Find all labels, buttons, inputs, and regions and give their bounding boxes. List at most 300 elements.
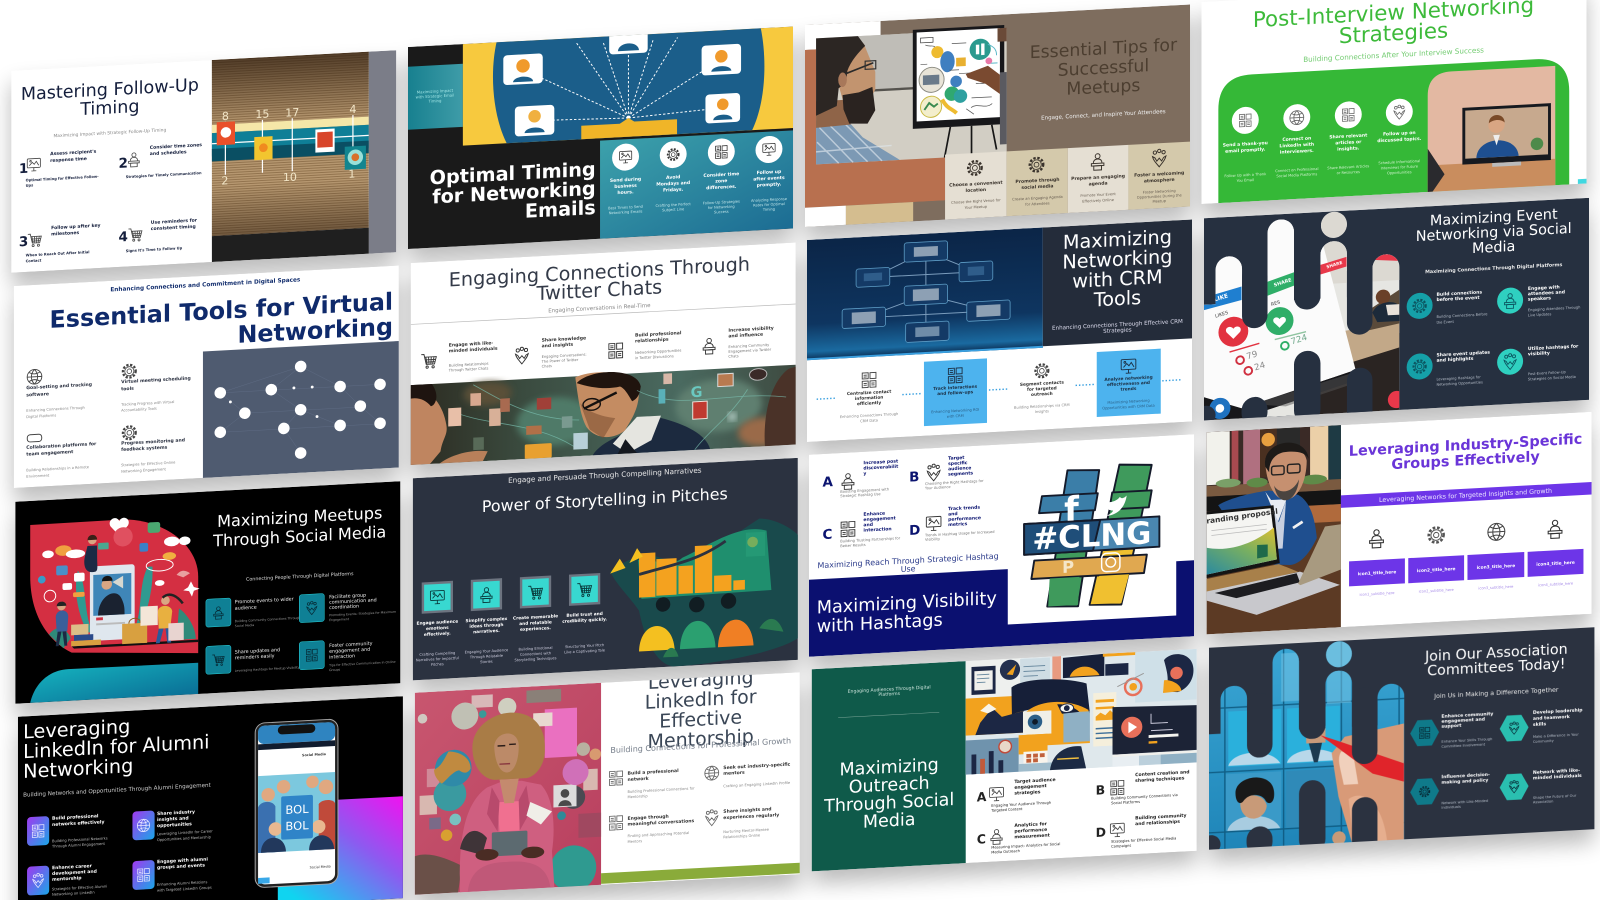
item: enhance community engagement: engagement and <box>1441 717 1485 725</box>
item: virtual meeting scheduling: Tracking Progress with Virtual <box>121 400 174 407</box>
subtitle: Maximizing Connections Through Digital Platforms <box>1425 262 1563 275</box>
item: analyze effectiveness <box>1097 349 1161 417</box>
item: consider time zone differences: zone <box>715 179 727 185</box>
item: build professional networks: Building Professional Networks <box>52 836 108 843</box>
item A: y <box>863 472 866 477</box>
item: share relevant articles: Share Relevant Articles <box>1327 164 1369 170</box>
item: engage audience emotions <box>416 582 459 668</box>
title box 1: icon1_title_here <box>1358 569 1396 577</box>
card: promote through social media <box>1007 148 1068 216</box>
item 4: Signs It's Time to Follow Up <box>126 246 183 253</box>
wood photo with timeline <box>212 52 369 236</box>
item C: C <box>977 831 986 847</box>
card: choose a convenient location: Choose the Right Venue for <box>951 198 1001 205</box>
item: share knowledge: Share knowledge <box>542 336 586 344</box>
item: progress monitoring: feedback systems <box>121 445 168 453</box>
item 3: milestones <box>51 230 79 237</box>
photo: man with laptop at cafe: randing proposal <box>1206 507 1278 526</box>
item B: Social Platforms <box>1111 800 1140 805</box>
item D: D <box>909 522 920 539</box>
item: utilize hashtags: Utilize hashtags for <box>1528 345 1578 352</box>
item 2: 2 <box>119 155 128 172</box>
item C <box>822 510 901 549</box>
item: track interactions: Track interactions <box>933 385 977 392</box>
subtitle: Enhancing Connections Through Effective CRM <box>1052 319 1183 332</box>
item: virtual meeting scheduling: Virtual meeting scheduling <box>121 377 191 385</box>
card: choose a convenient location: Your Meetup <box>965 205 988 210</box>
item: follow up on discussed topics: Interviews for Future <box>1381 164 1419 170</box>
item: enhance career development: Enhance career <box>52 864 92 871</box>
green side panel <box>812 661 966 871</box>
item: centralize contact: Centralize contact <box>847 390 891 397</box>
item: engage audience emotions: Narratives for Impactful <box>416 656 459 662</box>
item: avoid mondays and fridays: Crafting the Perfect <box>656 202 691 208</box>
item C: Measuring Impact: Analytics for Social <box>991 842 1060 850</box>
item: engage through conversations: Engage through <box>628 815 669 822</box>
title box 1 <box>1349 558 1405 597</box>
item C: performance <box>1014 827 1047 835</box>
item D: D <box>1096 824 1106 840</box>
item: influence decision-making: Network with Like-Minded <box>1441 799 1488 805</box>
item: share industry insights: insights and <box>157 815 189 823</box>
item: segment contacts: for targeted <box>1027 385 1057 393</box>
panel: slide Maximizing Meetups Through Social Media <box>15 481 400 704</box>
item: share knowledge: Engaging Conversations: <box>542 353 587 359</box>
item: network with like-minded individuals <box>1500 767 1582 806</box>
item: avoid mondays and fridays: Mondays and <box>656 180 690 188</box>
panel: slide Leveraging LinkedIn for Alumni Networking <box>18 696 403 900</box>
item: share industry insights <box>132 807 213 843</box>
title: Mentorship <box>648 726 754 753</box>
title: Maximizing Visibility <box>817 589 997 618</box>
panel: slide Engaging Connections Through Twitter Chats <box>411 243 796 465</box>
item D: Campaigns <box>1111 844 1131 849</box>
title box 1: icon1_subtitle_here <box>1359 591 1395 597</box>
item: centralize contact: Enhancing Connections Through <box>840 412 898 419</box>
card: foster a welcoming atmosphere: atmosphere <box>1144 177 1175 185</box>
icon: globe <box>1488 523 1505 541</box>
item: like-minded individuals <box>421 340 498 374</box>
subtitle: Join Us in Making a Difference Together <box>1433 687 1559 700</box>
item C: engagement <box>863 515 897 523</box>
item: engage with alumni groups: Engage with alumni <box>157 858 208 865</box>
item: build connections: the Event <box>1436 320 1454 325</box>
item: consider time zone differences: differences. <box>706 184 737 191</box>
item: follow up after events: promptly. <box>757 181 782 189</box>
title: Power of Storytelling in Pitches <box>482 484 728 516</box>
item: segment contacts: outreach <box>1031 391 1053 398</box>
title: Meetups <box>1066 76 1140 100</box>
title: Media <box>863 810 915 833</box>
item A: Target audience <box>1014 778 1056 785</box>
item B: Building Community Connections via <box>1111 793 1178 801</box>
item B: sharing techniques <box>1135 775 1185 784</box>
panel: slide Maximizing Visibility with Hashtags <box>809 434 1194 657</box>
item: create memorable experiences: Create memorable <box>513 614 558 622</box>
item B: Your Audience <box>925 485 951 490</box>
item: network with like-minded individuals: Network with like- <box>1533 768 1580 776</box>
item C: measurement <box>1014 832 1051 840</box>
green panel <box>1218 57 1569 203</box>
title: Maximizing <box>840 755 939 781</box>
item: influence decision-making: Individuals <box>1441 805 1461 810</box>
item: share industry insights: Leveraging LinkedIn for Career <box>157 829 213 836</box>
photo: man with laptop at cafe <box>1206 425 1341 634</box>
divider <box>411 304 796 325</box>
item: network with like-minded individuals: Association <box>1533 800 1553 805</box>
illustration collage <box>966 649 1197 775</box>
item: send during business hours <box>608 143 643 215</box>
item 2: Strategies for Timely Communication <box>126 171 202 179</box>
item: centralize contact <box>840 371 898 424</box>
item: promote events <box>206 594 300 630</box>
item A: A <box>822 474 833 491</box>
title: Networking via Social <box>1416 221 1572 245</box>
item A: Engaging Your Audience Through <box>991 801 1051 808</box>
item: track interactions: with CRM <box>947 414 964 419</box>
item: create memorable experiences: Connections with <box>520 651 551 657</box>
item: facilitate communication: Facilitate group <box>329 594 366 601</box>
item A: A <box>977 789 987 804</box>
photo in pill mask: RES <box>1270 300 1281 308</box>
item: analyze effectiveness: Maximizing Networking <box>1107 399 1150 405</box>
card: prepare an engaging agenda: Prepare an engaging <box>1071 174 1125 182</box>
item C: Media Outreach <box>991 849 1020 855</box>
wood photo with timeline: 4 <box>349 103 356 116</box>
item: connect on LinkedIn: interviewers. <box>1280 148 1314 156</box>
subtitle: Building Connections for Professional Growth <box>610 736 791 755</box>
panel: slide Maximizing Event Networking via Social Media <box>1196 198 1589 434</box>
item: send a thank-you email: You Email <box>1237 178 1254 183</box>
item: avoid mondays and fridays: Subject Line <box>662 207 685 212</box>
item: influence decision-making: Influence decision- <box>1441 773 1490 780</box>
panel: slide Power of Storytelling in Pitches <box>413 458 798 680</box>
item: simplify complex ideas: ideas through <box>469 622 503 630</box>
item A: Targeted Content <box>990 807 1023 813</box>
card: choose a convenient location <box>945 151 1007 220</box>
terracotta block <box>805 43 945 208</box>
panel: slide Maximizing Networking with CRM Tools <box>807 220 1192 442</box>
item: enhance career development: development and <box>52 869 97 877</box>
item: build relationships: Networking Opportunities <box>635 349 681 355</box>
item: build trust <box>562 574 607 655</box>
icon: podium person <box>1370 529 1383 548</box>
title: with Hashtags <box>817 611 943 637</box>
title: Successful <box>1058 56 1149 81</box>
item: follow up after events: Analyzing Response <box>751 197 787 203</box>
item: enhance community engagement: Enhance community <box>1441 712 1493 720</box>
item: foster community: Foster community <box>329 642 372 649</box>
network dots panel <box>203 341 399 478</box>
item: analyze effectiveness: effectiveness and <box>1107 380 1150 388</box>
item: network with like-minded individuals: minded individuals <box>1533 773 1582 782</box>
subtitle: Strategies <box>1103 327 1132 335</box>
item: build connections <box>1407 289 1488 326</box>
photo in pill mask: LIKES <box>1215 310 1229 320</box>
purple band <box>1341 482 1592 508</box>
item: share event updates: Share event updates <box>1436 351 1490 358</box>
item: build professional networks: Build professional <box>52 814 99 822</box>
item D: Strategies for Effective Social Media <box>1111 836 1176 844</box>
item: build network: network <box>628 776 650 783</box>
item D: and <box>948 511 958 518</box>
item: build network: Build a professional <box>628 769 679 777</box>
item B: B <box>1096 782 1105 798</box>
item B: B <box>909 469 919 486</box>
item: connect on LinkedIn <box>1275 103 1318 178</box>
item: foster community: interaction <box>329 653 355 661</box>
item: build network: Mentorship <box>628 794 648 799</box>
dark lower band <box>212 228 369 262</box>
item 3: 3 <box>19 234 28 250</box>
item: like-minded individuals: Engage with like- <box>449 341 493 349</box>
item: track interactions: Enhancing Networking ROI <box>931 408 979 414</box>
accent strip <box>807 346 1043 360</box>
item: enhance career development: Strategies for Effective Alumni <box>52 885 107 891</box>
item: send during business hours: hours. <box>617 189 634 196</box>
item: send a thank-you email: Send a thank-you <box>1223 141 1268 149</box>
small heading: Engaging Audiences Through Digital <box>848 685 931 695</box>
title: Essential Tips for <box>1030 35 1177 63</box>
item D: performance <box>948 515 981 523</box>
subtitle: Engage, Connect, and Inspire Your Attendees <box>1041 109 1166 122</box>
item B: audience <box>948 465 971 472</box>
item: build network: Building Professional Connections for <box>628 786 695 794</box>
title box 4: icon4_subtitle_here <box>1538 581 1574 587</box>
title: Join Our Association <box>1425 642 1568 665</box>
item: share knowledge: and insights <box>542 342 574 349</box>
item 3: Contact <box>26 258 42 263</box>
photo: man at whiteboard <box>816 25 1007 164</box>
subtitle: Use <box>901 564 916 574</box>
item: segment contacts <box>1014 363 1070 415</box>
photo: woman with tablet and floating spheres <box>415 683 601 900</box>
item 1: 1 <box>19 161 28 177</box>
item: enhance career development: Networking on LinkedIn <box>52 890 95 897</box>
card: foster a welcoming atmosphere: Meetup <box>1152 199 1167 204</box>
item: avoid mondays and fridays: Fridays. <box>663 187 684 194</box>
item: foster community <box>299 637 396 674</box>
item 2: Consider time zones <box>150 143 202 151</box>
title: Optimal Timing <box>430 158 596 189</box>
item C: and <box>863 522 873 528</box>
item: engage audience emotions: emotions <box>426 625 449 632</box>
item: consider time zone differences: Consider time <box>703 172 739 179</box>
card: promote through social media: for Attendees <box>1025 201 1050 207</box>
navy L-shaped block <box>809 559 1194 657</box>
item: increase visibility: and influence <box>728 332 763 339</box>
item: foster community: engagement and <box>329 647 370 655</box>
item: develop leadership <box>1500 707 1583 746</box>
item: build relationships: Build professional <box>635 331 681 339</box>
panel: slide Leveraging LinkedIn for Effective Mentorship <box>415 664 800 900</box>
panel: slide Essential Tips for Successful Meetups <box>805 5 1190 227</box>
panel: slide Optimal Timing for Networking Emails <box>408 16 793 249</box>
item 3 <box>19 223 101 264</box>
item: segment contacts: Building Relationships via CRM <box>1014 403 1070 410</box>
item: share updates: Share updates and <box>235 648 280 656</box>
item: utilize hashtags: visibility <box>1528 350 1550 357</box>
item: facilitate communication: Promoting Events: Strategies for Maximum <box>329 610 396 617</box>
title: Leveraging <box>648 666 754 694</box>
teal panel <box>600 130 793 239</box>
item B: segments <box>948 470 973 478</box>
item: build relationships: in Twitter Discussions <box>635 354 674 360</box>
item: share relevant articles: articles or <box>1335 139 1362 146</box>
item: promote events: Social Media <box>235 623 254 628</box>
wood photo with timeline: 15 <box>255 108 269 121</box>
item: foster community: Groups <box>329 668 341 672</box>
teal tag: Timing <box>427 98 442 104</box>
card: prepare an engaging agenda: Effectively Online <box>1082 198 1115 204</box>
item: facilitate communication <box>299 590 396 624</box>
item: engage with attendees: Engage with <box>1528 285 1560 292</box>
panel: slide Mastering Follow-Up Timing <box>11 50 396 273</box>
item: increase visibility: Increase visibility <box>728 326 774 334</box>
title: Committees Today! <box>1427 656 1566 680</box>
item: collaboration platforms <box>26 431 97 479</box>
item: centralize contact: information <box>855 395 883 402</box>
item: share knowledge <box>515 335 587 370</box>
item: engage with attendees: Live Updates <box>1528 312 1551 318</box>
teal tag <box>408 64 463 130</box>
item: virtual meeting scheduling: Accountability Tools <box>121 407 157 413</box>
title: Strategies <box>1339 18 1448 49</box>
photo: man on video call <box>1428 66 1555 192</box>
item: share insights: Share insights and <box>723 807 772 815</box>
item: share event updates: and highlights <box>1436 356 1474 364</box>
subtitle: Engaging Conversations in Real-Time <box>548 303 651 314</box>
item D: Trends in Hashtag Usage for Increased <box>925 530 995 538</box>
item B <box>909 454 984 491</box>
item: engage through conversations: Finding and Approaching Potential <box>628 831 689 838</box>
item: engage with attendees: speakers <box>1528 295 1551 303</box>
item: analyze effectiveness: Analyze networking <box>1104 375 1153 383</box>
item 1: response time <box>50 156 87 164</box>
item 2 <box>119 142 202 180</box>
wood photo with timeline: 1 <box>348 167 355 181</box>
item: create memorable experiences <box>513 576 558 663</box>
item: avoid mondays and fridays: Avoid <box>666 175 680 181</box>
item: goal-setting: software <box>26 391 49 398</box>
item: influence decision-making: making and policy <box>1441 777 1488 786</box>
teal tag: Maximizing Impact <box>417 88 453 95</box>
item: network with like-minded individuals: Shape the Future of Our <box>1533 794 1576 800</box>
item: engage through conversations <box>609 812 694 845</box>
item: collaboration platforms: Collaboration platforms for <box>26 442 96 451</box>
item: analyze effectiveness: Opportunities with CRM Data <box>1102 404 1155 410</box>
item: engage through conversations: Mentors <box>628 839 642 844</box>
item C: Enhance <box>863 512 885 518</box>
item: segment contacts: Insights <box>1035 409 1049 414</box>
card: choose a convenient location: Choose a convenient <box>949 181 1003 189</box>
item: build relationships: relationships <box>635 337 669 344</box>
title: Networking <box>23 754 133 783</box>
item: send a thank-you email: Follow Up with a Thank <box>1224 172 1266 178</box>
network illustration <box>463 16 793 146</box>
title: Maximizing Event <box>1430 207 1558 230</box>
item: increase visibility <box>703 325 774 360</box>
item: build trust: credibility quickly. <box>562 616 607 625</box>
panel: slide Leveraging Industry-Specific Groups Effectively <box>1206 412 1592 634</box>
wood photo with timeline: 17 <box>285 106 299 120</box>
title: with CRM <box>1072 265 1163 293</box>
item: progress monitoring: Strategies for Effective Online <box>121 461 175 467</box>
photo in pill mask: SHARE <box>1326 260 1343 270</box>
item: share insights <box>706 806 779 840</box>
item: enhance community engagement: Enhance Your Skills Through <box>1441 737 1492 744</box>
item: engage with attendees <box>1497 283 1580 319</box>
item: increase visibility: Chats <box>728 354 739 359</box>
teal shape <box>30 662 198 703</box>
item: collaboration platforms: Environment <box>26 473 50 479</box>
item: share updates: reminders easily <box>235 653 275 661</box>
item: share industry insights: Opportunities and Mentorship <box>157 835 212 842</box>
item: develop leadership: Make a Difference in Your <box>1533 733 1579 739</box>
card: foster a welcoming atmosphere <box>1128 142 1190 210</box>
item: share insights: Nurturing Mentor-Mentee <box>723 828 769 834</box>
item: engage with attendees: attendees and <box>1528 289 1565 297</box>
item: create memorable experiences: Building Emotional <box>519 646 552 652</box>
item: connect on LinkedIn: Connect on <box>1282 137 1311 143</box>
item B: Target <box>948 456 964 462</box>
photo in pill mask <box>1201 637 1404 864</box>
red illustration <box>30 514 200 662</box>
item: share knowledge: The Power of Twitter <box>541 358 579 364</box>
photo in pill mask: 79 <box>1246 349 1259 362</box>
title: LinkedIn for <box>645 686 757 714</box>
item: build connections: Build connections <box>1436 290 1482 298</box>
wood photo with timeline: 10 <box>283 171 297 184</box>
item: send during business hours: Networking Emails <box>609 210 643 215</box>
item: track interactions: and follow-ups <box>937 389 974 397</box>
title: Effective <box>659 706 742 733</box>
item: consider time zone differences: Success <box>714 210 729 214</box>
item: influence decision-making <box>1410 772 1490 812</box>
item: engage with attendees: Engaging Attendees Through <box>1528 305 1580 312</box>
title: Networking <box>237 313 393 349</box>
subtitle: Maximizing Reach Through Strategic Hashtag <box>818 552 999 570</box>
photo in pill mask: 24 <box>1253 360 1267 373</box>
card: promote through social media: social media <box>1021 183 1054 191</box>
purple band: Leveraging Networks for Targeted Insights and Growth <box>1379 488 1552 504</box>
title: Outreach <box>849 774 930 798</box>
item: build trust: Build trust and <box>566 612 603 619</box>
item: send a thank-you email <box>1223 106 1268 184</box>
title: for Networking <box>432 177 596 208</box>
overline: Engage and Persuade Through Compelling Narratives <box>508 466 702 485</box>
item: send during business hours: business <box>614 183 637 190</box>
item C: Building Trusting Partnerships for <box>840 536 900 544</box>
item C: interaction <box>863 526 892 534</box>
panel: slide Post-Interview Networking Strategies <box>1202 0 1587 204</box>
item: send a thank-you email: email promptly. <box>1225 147 1266 155</box>
phone mockup: Social Media <box>302 752 326 757</box>
item A: Increase post <box>863 459 898 466</box>
photo: man among floating social icons <box>411 362 796 465</box>
item: follow up after events: Rates for Optimal <box>753 202 785 208</box>
item: follow up on discussed topics: discussed topics. <box>1377 136 1422 144</box>
item: enhance career development: mentorship <box>52 875 82 883</box>
item: virtual meeting scheduling <box>120 362 191 413</box>
item A: Boosting Engagement with <box>840 487 889 494</box>
item: engage with alumni groups: groups and events <box>157 862 205 871</box>
item: utilize hashtags: Post-Event Follow-Up <box>1528 370 1566 376</box>
title: Networking <box>1062 245 1172 274</box>
panel: slide Maximizing Outreach Through Social Media <box>812 649 1197 871</box>
item: develop leadership: skills <box>1533 721 1546 728</box>
card: prepare an engaging agenda: agenda <box>1089 180 1108 187</box>
